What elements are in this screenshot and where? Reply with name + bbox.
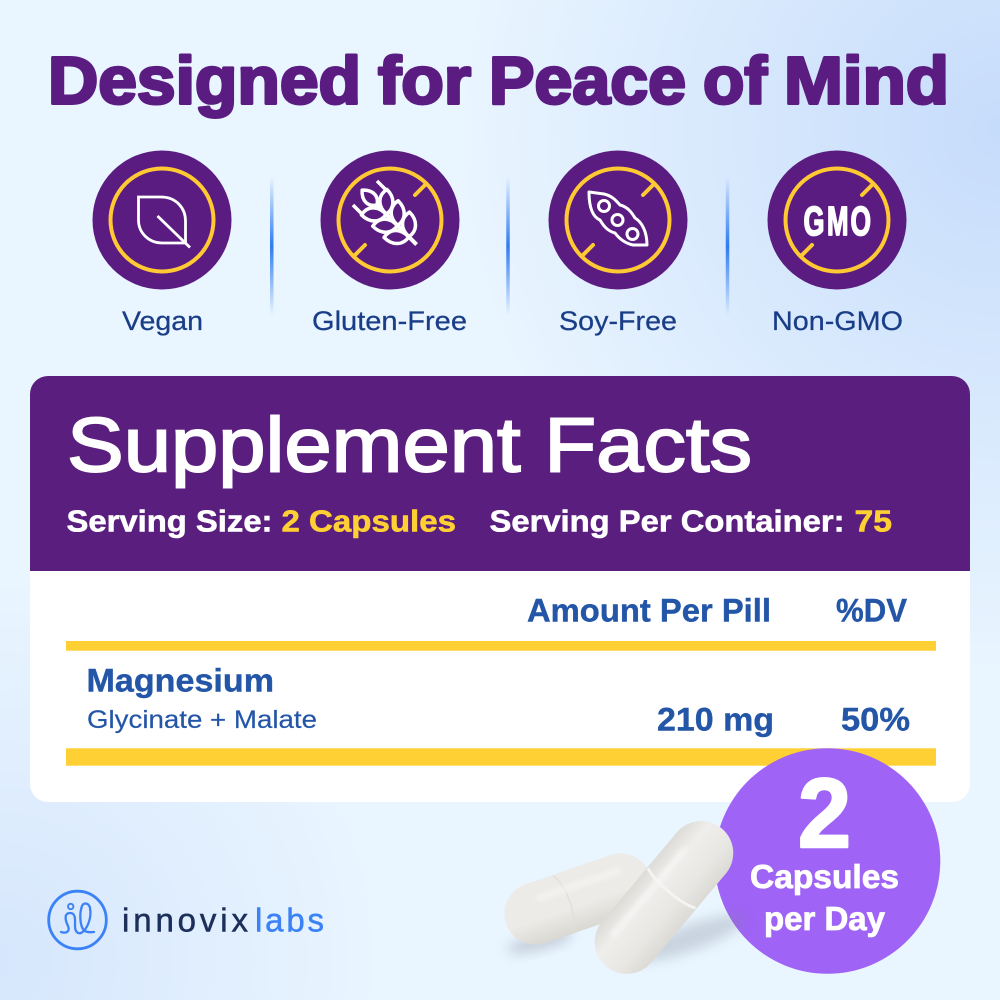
panel: free-from badges	[92, 150, 906, 336]
panel: supplement facts	[30, 376, 970, 802]
callout: 2 capsules per day: 2	[798, 758, 851, 868]
serving size: Serving Size:	[66, 504, 272, 538]
badge: non-gmo	[768, 150, 906, 336]
servings per container: Serving Per Container:	[490, 504, 844, 538]
serving size	[66, 504, 456, 538]
icon: GMO lettering: M	[827, 198, 848, 244]
title: for	[378, 44, 471, 118]
header band	[30, 376, 970, 571]
icon: GMO lettering: G	[804, 198, 824, 244]
wordmark: labs	[255, 902, 324, 938]
capsules illustration	[496, 808, 749, 987]
title: Peace	[489, 44, 686, 118]
badge: vegan	[92, 150, 232, 336]
label: non-gmo: Non-GMO	[772, 306, 903, 336]
wordmark: innovix	[122, 902, 248, 938]
column headers	[527, 592, 908, 628]
badge: gluten-free	[312, 150, 467, 336]
divider 3	[726, 177, 729, 315]
column headers: %DV	[836, 592, 908, 628]
callout: 2 capsules per day: Capsules	[750, 858, 899, 895]
badge: soy-free	[548, 150, 688, 336]
icon: soybean pod	[589, 192, 647, 245]
title: of	[703, 44, 768, 118]
column headers: Amount Per Pill	[527, 592, 771, 628]
servings per container: 75	[854, 504, 892, 538]
icon: GMO lettering: O	[850, 198, 871, 244]
capsule: front	[582, 808, 746, 987]
icon: logo mark	[49, 891, 106, 949]
heading: supplement facts: Supplement Facts	[67, 402, 752, 488]
label: vegan: Vegan	[122, 306, 203, 336]
title: Designed	[48, 44, 361, 118]
label: gluten-free: Gluten-Free	[312, 306, 467, 336]
row: magnesium	[86, 662, 910, 738]
icon: leaf	[138, 197, 190, 248]
icon: wheat	[349, 177, 429, 257]
row: magnesium: Glycinate + Malate	[87, 706, 317, 734]
row: magnesium: 50%	[841, 702, 910, 738]
callout: 2 capsules per day: per Day	[764, 900, 886, 937]
title	[48, 44, 949, 118]
row: magnesium: Magnesium	[86, 662, 274, 698]
title: Mind	[784, 44, 949, 118]
callout: 2 capsules per day	[715, 748, 940, 974]
icon: GMO lettering	[804, 198, 871, 244]
serving size: 2 Capsules	[282, 504, 456, 538]
divider 2	[506, 177, 510, 315]
capsule: back	[496, 845, 660, 953]
label: soy-free: Soy-Free	[559, 306, 677, 336]
logo: innovixlabs	[49, 891, 324, 949]
row: magnesium: 210 mg	[657, 702, 774, 738]
wordmark	[122, 902, 324, 938]
divider 1	[270, 177, 274, 315]
